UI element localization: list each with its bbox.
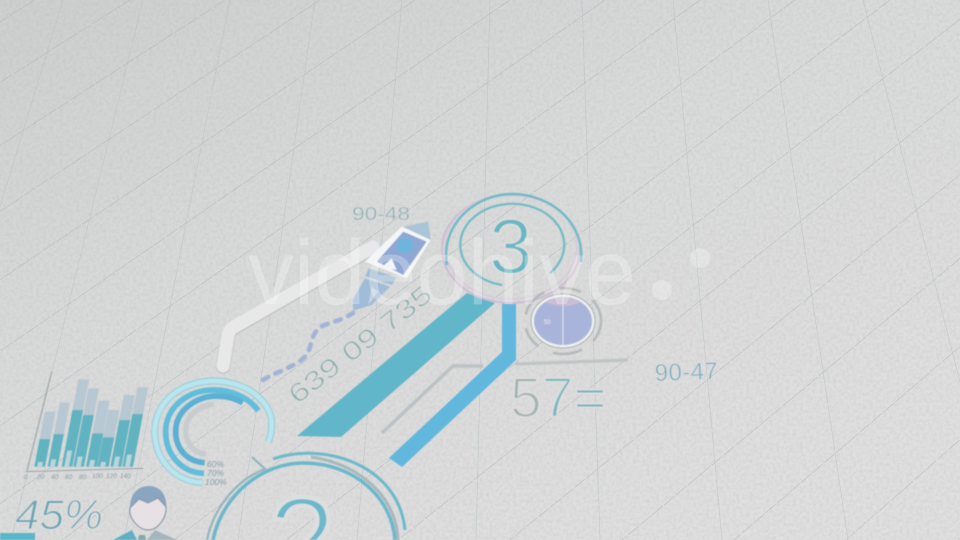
diagonal teal bar xyxy=(297,293,495,437)
badge rings around number 2 xyxy=(207,453,405,540)
bar chart axis labels: 140 xyxy=(120,473,131,480)
small inner bars xyxy=(37,451,133,467)
equation: 57=: 57= xyxy=(510,366,607,430)
ring legend xyxy=(205,459,227,487)
blue elbow bar xyxy=(389,303,516,467)
bar chart xyxy=(27,372,150,472)
label: 90-48: 90-48 xyxy=(352,204,410,224)
bar chart axis labels: 120 xyxy=(106,473,117,480)
dashed rocket trail xyxy=(263,313,353,380)
bar chart axis labels: 60 xyxy=(65,474,73,481)
bar chart axis labels: 20 xyxy=(36,474,45,481)
stat: 45%: 45% xyxy=(15,491,103,538)
white connector path to rocket xyxy=(223,247,373,367)
ring legend: 70% xyxy=(207,468,224,478)
icon: rocket xyxy=(353,222,431,311)
teal base bar xyxy=(0,533,35,540)
gauge: small circle 50 xyxy=(525,288,601,354)
bar chart axis labels: 40 xyxy=(51,474,59,481)
gray rule above 57= xyxy=(515,360,628,364)
bar chart axis labels xyxy=(24,473,131,481)
teal bars xyxy=(34,410,144,467)
badge: number 3 xyxy=(442,194,581,303)
number sequence: 639 09 735: 639 09 735 xyxy=(282,279,438,410)
gauge: small circle 50: 50 xyxy=(544,320,551,326)
bar chart axis labels: 100 xyxy=(92,473,103,480)
light bars xyxy=(34,379,150,467)
gray elbow line xyxy=(382,366,483,433)
bar chart axis labels: 0 xyxy=(24,474,28,481)
radial progress rings xyxy=(155,381,272,483)
label: 90-47: 90-47 xyxy=(654,358,718,387)
bar chart axis labels: 80 xyxy=(79,474,87,481)
badge: number 3: 3 xyxy=(489,202,532,290)
ring legend: 100% xyxy=(205,477,227,487)
ring legend: 60% xyxy=(207,459,224,469)
icon: person xyxy=(113,486,177,540)
watermark: videohive xyxy=(248,222,636,324)
